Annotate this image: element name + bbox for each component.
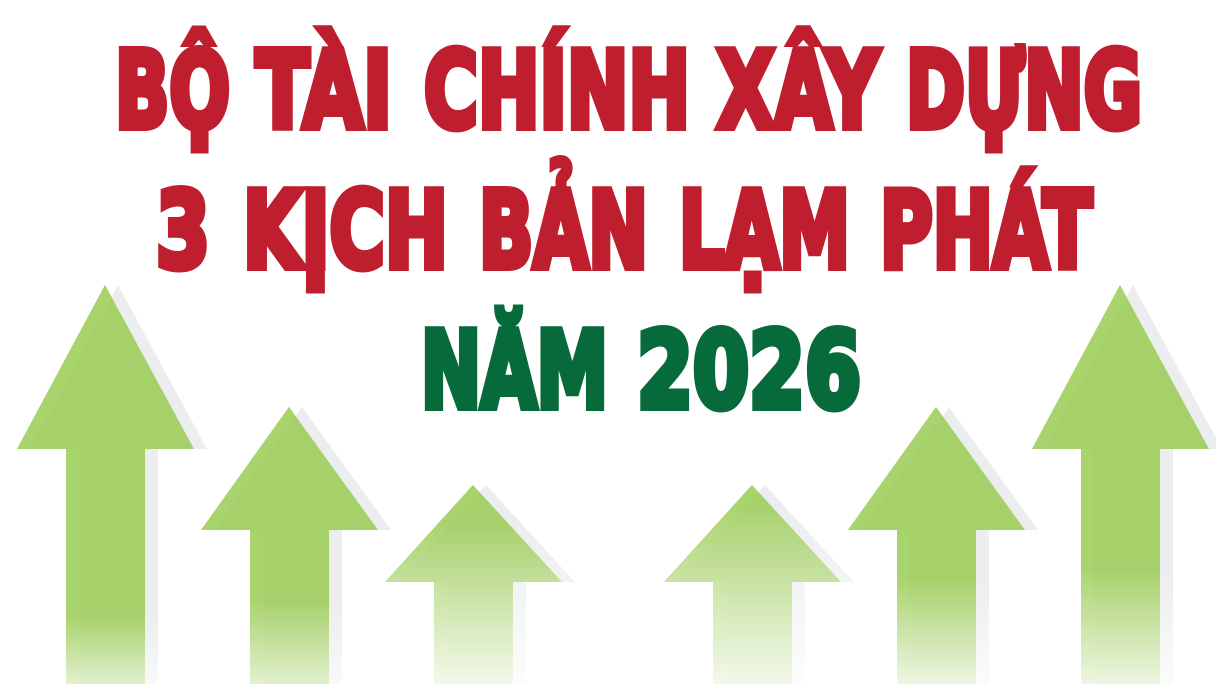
title line 1: CHÍNH <box>424 29 690 152</box>
title line 3: year: 2026 <box>637 310 861 432</box>
title line 2: PHÁT <box>880 169 1092 292</box>
title line 2: 3 <box>156 170 210 292</box>
title line 2: BẢN <box>479 159 648 292</box>
title line 3: year <box>421 308 861 432</box>
arrow 4 (centre right, short) <box>664 485 854 684</box>
title line 1: TÀI <box>256 29 392 152</box>
arrow 2 (left, medium) <box>201 407 391 684</box>
arrow 3 (centre left, short) <box>385 485 575 684</box>
title line 1: XÂY <box>717 29 880 152</box>
arrow 1 (far left, tall) <box>17 285 207 684</box>
title line 2: KỊCH <box>243 170 448 292</box>
title line 1: BỘ <box>115 29 230 152</box>
title line 1 <box>115 29 1142 152</box>
arrow 5 (right, medium) <box>848 407 1038 684</box>
title line 3: year: NĂM <box>421 308 608 432</box>
title line 2: LẠM <box>679 170 850 292</box>
arrow 6 (far right, tall) <box>1032 285 1216 684</box>
title line 2 <box>156 159 1092 292</box>
